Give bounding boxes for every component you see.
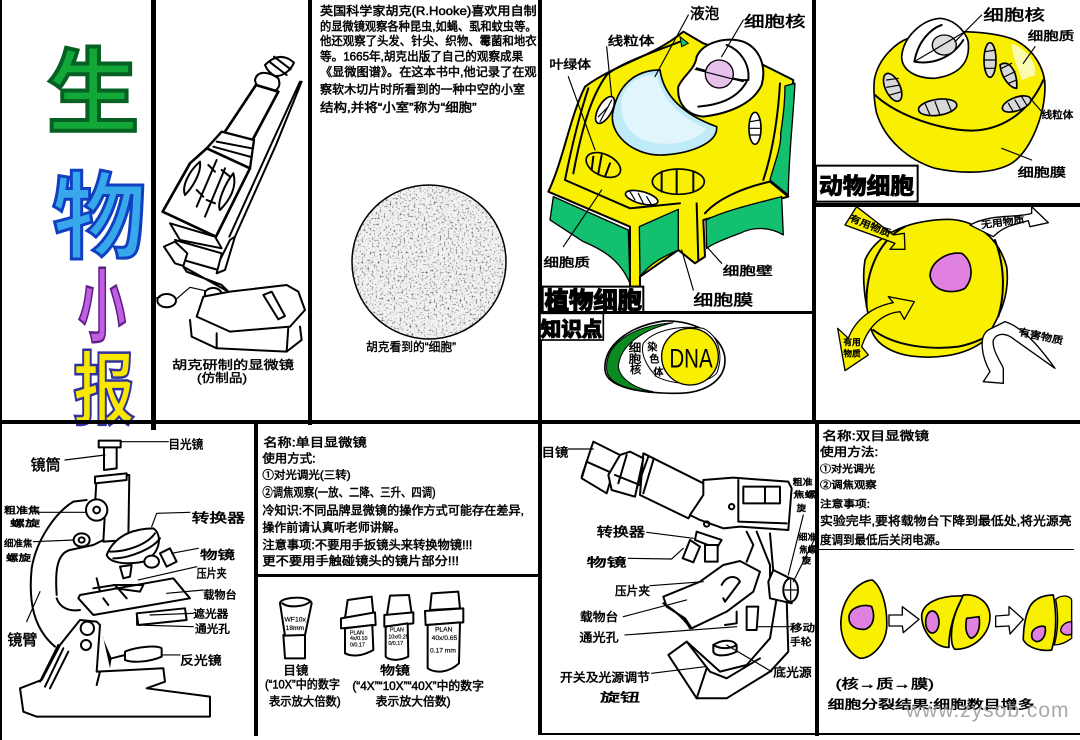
text block: binocular microscope usage: 注意事项: bbox=[820, 497, 870, 510]
title: 生物小报: 生 bbox=[47, 43, 139, 145]
plant cell labels: 细胞膜 bbox=[693, 292, 754, 309]
captions bbox=[265, 662, 484, 709]
arrow 2 bbox=[996, 607, 1023, 634]
title: 生物小报: 物 bbox=[52, 165, 146, 270]
nucleus bbox=[930, 253, 971, 292]
diagram: nucleus chromosome DNA bbox=[605, 321, 725, 393]
animal cell labels: 细胞核 bbox=[983, 7, 1045, 24]
animal cell labels: 细胞质 bbox=[1028, 29, 1074, 43]
arrow: useful substance retained: 物质 bbox=[843, 348, 861, 359]
diagram: nucleus chromosome DNA: 染 bbox=[647, 341, 657, 354]
stage 1 cell bbox=[841, 580, 887, 658]
arrow: harmful substance blocked: 有害物质 bbox=[1018, 325, 1064, 347]
binocular leader lines bbox=[568, 449, 817, 673]
arrow: waste out bbox=[970, 207, 1048, 237]
panel: monocular microscope bbox=[4, 436, 245, 717]
binocular labels: 旋钮 bbox=[600, 690, 640, 705]
panel: Hooke microscope bbox=[153, 57, 305, 352]
title: 生物小报: 小 bbox=[78, 263, 126, 352]
panel: plant cell bbox=[543, 5, 806, 313]
icon: objective 10x bbox=[384, 595, 413, 660]
text block: monocular microscope usage: 注意事项:不要用手扳镜头来转换物镜!!! bbox=[262, 537, 472, 552]
monocular labels: 目光镜 bbox=[168, 436, 203, 451]
text block: binocular microscope usage bbox=[820, 428, 1072, 547]
monocular labels: 螺旋 bbox=[6, 552, 32, 563]
monocular labels bbox=[4, 436, 245, 667]
cell body bbox=[864, 219, 1007, 357]
text block: monocular microscope usage: 冷知识:不同品牌显微镜的操作方式可能存在差异, bbox=[262, 502, 524, 517]
text block: monocular microscope usage: 操作前请认真听老师讲解。 bbox=[262, 520, 406, 535]
arrow: harmful substance blocked bbox=[982, 322, 1064, 383]
cell inner line bbox=[867, 227, 1003, 348]
stage 3 cells bbox=[1023, 595, 1072, 650]
cytoplasm highlight bbox=[1012, 43, 1035, 80]
arrow: useful substance in: 有用物质 bbox=[848, 212, 893, 239]
text block: Hooke history: 英国科学家胡克(R.Hooke)喜欢用自制 bbox=[320, 3, 537, 18]
icon: eyepiece: WF10x bbox=[284, 617, 307, 624]
plant cell labels: 液泡 bbox=[690, 5, 720, 22]
icon: objective 40x: 40x/0.65 bbox=[432, 635, 457, 642]
icon: eyepiece: 18mm bbox=[286, 626, 304, 632]
vacuole bbox=[612, 70, 717, 155]
binocular labels: 物镜 bbox=[587, 555, 627, 570]
monocular labels: 通光孔 bbox=[195, 622, 230, 635]
icon: objective 10x: 0/0.17 bbox=[388, 641, 403, 647]
monocular labels: 螺旋 bbox=[10, 518, 41, 529]
cell wall green panels bbox=[550, 37, 795, 283]
diagram: nucleus chromosome DNA: 细 bbox=[629, 342, 641, 355]
diagram: nucleus chromosome DNA: 核 bbox=[630, 363, 642, 376]
caption: Hooke microscope: 胡克研制的显微镜 bbox=[172, 357, 294, 372]
icon: eyepiece bbox=[280, 598, 312, 658]
binocular labels: 细准 bbox=[798, 531, 817, 542]
captions: 表示放大倍数) bbox=[269, 694, 341, 709]
text block: binocular microscope usage: ①对光调光 bbox=[820, 463, 875, 476]
monocular labels: 载物台 bbox=[203, 588, 237, 601]
binocular labels: 移动 bbox=[790, 622, 815, 635]
text block: binocular microscope usage: 度调到最低后关闭电源。 bbox=[820, 532, 947, 547]
text block: binocular microscope usage: 名称:双目显微镜 bbox=[822, 428, 929, 443]
diagram: nucleus chromosome DNA: 色 bbox=[649, 353, 659, 366]
cell body bbox=[548, 32, 793, 287]
plant cell labels bbox=[543, 5, 806, 309]
monocular labels: 转换器 bbox=[192, 510, 245, 525]
captions: (“10X”中的数字 bbox=[265, 676, 340, 691]
text block: binocular microscope usage: ②调焦观察 bbox=[820, 478, 877, 491]
monocular labels: 遮光器 bbox=[193, 608, 229, 621]
icon: objective 10x: 10x/0.25 bbox=[388, 634, 409, 640]
captions: (“4X”“10X”“40X”中的数字 bbox=[352, 678, 484, 693]
nucleus bbox=[902, 18, 968, 78]
icon: objective 40x: 0.17 mm bbox=[430, 647, 456, 654]
monocular leader lines bbox=[27, 442, 203, 655]
arrow: useful substance in bbox=[845, 207, 905, 249]
binocular labels: 目镜 bbox=[542, 445, 568, 460]
text block: binocular microscope usage: 实验完毕,要将载物台下降到最低处,将光源亮 bbox=[820, 513, 1072, 528]
cell rim line bbox=[875, 80, 1043, 131]
captions: 表示放大倍数) bbox=[376, 694, 451, 709]
binocular labels: 旋 bbox=[797, 502, 806, 513]
monocular labels: 反光镜 bbox=[180, 652, 222, 667]
binocular labels: 压片夹 bbox=[615, 584, 650, 598]
text block: monocular microscope usage: 名称:单目显微镜 bbox=[263, 435, 367, 450]
captions: 目镜 bbox=[283, 662, 308, 677]
arrow: useful substance retained bbox=[838, 297, 914, 371]
diagram: nucleus chromosome DNA: 胞 bbox=[629, 353, 642, 365]
text block: monocular microscope usage: ②调焦观察(一放、二降、三升、四调) bbox=[262, 485, 436, 500]
diagram: nucleus chromosome DNA: 体 bbox=[653, 366, 663, 378]
plant cell labels: 线粒体 bbox=[608, 33, 654, 48]
text block: Hooke history: 等。1665年,胡克出版了自己的观察成果 bbox=[320, 49, 523, 64]
panel: binocular microscope bbox=[542, 442, 817, 705]
monocular labels: 镜筒 bbox=[31, 456, 61, 474]
binocular labels: 转换器 bbox=[597, 525, 645, 540]
icon: monocular microscope bbox=[20, 441, 210, 717]
stage 2 cell bbox=[922, 595, 990, 649]
icon: objective 4x bbox=[341, 597, 376, 656]
binocular labels: 手轮 bbox=[790, 636, 812, 649]
text block: monocular microscope usage bbox=[262, 435, 524, 568]
text block: Hooke history: 察软木切片时所看到的一种中空的小室 bbox=[320, 81, 525, 96]
text block: monocular microscope usage: 使用方式: bbox=[262, 450, 316, 465]
text block: Hooke history bbox=[320, 3, 537, 115]
text block: Hooke history: 他还观察了头发、针尖、织物、霉菌和地衣 bbox=[320, 33, 537, 48]
division caption bbox=[828, 676, 1034, 711]
panel: DNA knowledge point bbox=[540, 313, 725, 393]
animal cell labels: 线粒体 bbox=[1042, 108, 1073, 121]
text block: binocular microscope usage: 使用方法: bbox=[820, 444, 878, 459]
watermark: www.zysob.com bbox=[905, 699, 1070, 722]
division caption: 细胞分裂结果:细胞数目增多 bbox=[828, 696, 1034, 711]
binocular labels: 底光源 bbox=[773, 665, 812, 680]
panel: eyepiece and objectives bbox=[265, 592, 484, 709]
animal cell leader lines bbox=[955, 15, 1042, 160]
binocular labels: 载物台 bbox=[580, 609, 618, 624]
monocular labels: 细准焦 bbox=[4, 538, 32, 549]
plant cell leader lines bbox=[563, 15, 743, 290]
icon: objective 4x: PLAN bbox=[350, 630, 364, 636]
binocular labels: 旋 bbox=[802, 555, 811, 566]
text block: Hooke history: 的显微镜观察各种昆虫,如蝇、虱和蚊虫等。 bbox=[320, 19, 537, 34]
heading: animal cell: 动物细胞 bbox=[819, 173, 914, 199]
figure: cork cells circle bbox=[350, 183, 508, 354]
plant cell labels: 细胞壁 bbox=[723, 263, 773, 278]
monocular labels: 物镜 bbox=[200, 547, 235, 562]
text block: monocular microscope usage: 更不要用手触碰镜头的镜片部分!!! bbox=[262, 553, 459, 568]
icon: objective 4x: 0/0.17 bbox=[350, 643, 365, 649]
binocular labels: 焦螺 bbox=[799, 543, 816, 554]
binocular labels: 开关及光源调节 bbox=[560, 671, 650, 685]
panel: cell membrane transport bbox=[838, 207, 1064, 383]
cell body bbox=[874, 32, 1045, 172]
division caption: (核→质→膜) bbox=[836, 676, 934, 691]
text block: Hooke history: 《显微图谱》。在这本书中,他记录了在观 bbox=[320, 64, 537, 79]
animal cell labels bbox=[983, 7, 1074, 180]
icon: binocular microscope bbox=[582, 442, 798, 698]
binocular labels: 通光孔 bbox=[579, 631, 619, 645]
title: 生物小报 bbox=[47, 43, 146, 435]
heading: knowledge point: 知识点 bbox=[541, 318, 602, 341]
plant cell labels: 细胞质 bbox=[543, 256, 590, 270]
title: 生物小报: 报 bbox=[73, 346, 135, 435]
arrow: waste out: 无用物质 bbox=[980, 213, 1025, 230]
text block: monocular microscope usage: ①对光调光(三转) bbox=[262, 468, 351, 481]
binocular labels bbox=[542, 445, 817, 705]
nucleus bbox=[678, 40, 763, 117]
mitochondria bbox=[880, 43, 1033, 118]
icon: Hooke microscope drawing bbox=[153, 57, 305, 352]
plant cell labels: 叶绿体 bbox=[549, 56, 591, 71]
icon: objective 40x: PLAN bbox=[435, 627, 453, 634]
plant cell labels: 细胞核 bbox=[744, 14, 806, 31]
arrow 1 bbox=[889, 607, 919, 633]
chloroplasts and mitochondria bbox=[582, 94, 761, 208]
heading: plant cell: 植物细胞 bbox=[545, 287, 642, 313]
figure: cork cells circle: 胡克看到的“细胞” bbox=[366, 339, 456, 354]
icon: objective 4x: 4x/0.10 bbox=[350, 636, 368, 642]
icon: objective 10x: PLAN bbox=[390, 628, 404, 634]
binocular labels: 焦螺 bbox=[793, 489, 816, 500]
heading: animal cell bbox=[816, 166, 918, 202]
monocular labels: 镜臂 bbox=[7, 631, 38, 649]
vacuole highlight bbox=[621, 75, 707, 144]
caption: Hooke microscope bbox=[172, 357, 294, 385]
arrow: useful substance retained: 有用 bbox=[843, 336, 861, 347]
caption: Hooke microscope: (仿制品) bbox=[197, 371, 247, 385]
captions: 物镜 bbox=[380, 662, 410, 677]
binocular labels: 粗准 bbox=[793, 476, 813, 487]
icon: objective 40x bbox=[425, 592, 463, 672]
text block: Hooke history: 结构,并将“小室”称为“细胞” bbox=[320, 100, 477, 115]
animal cell labels: 细胞膜 bbox=[1018, 166, 1066, 180]
monocular labels: 压片夹 bbox=[197, 567, 227, 581]
diagram: nucleus chromosome DNA: DNA bbox=[669, 343, 713, 373]
panel: cell division bbox=[828, 580, 1072, 711]
panel: animal cell bbox=[816, 7, 1074, 202]
monocular labels: 粗准焦 bbox=[4, 504, 40, 515]
